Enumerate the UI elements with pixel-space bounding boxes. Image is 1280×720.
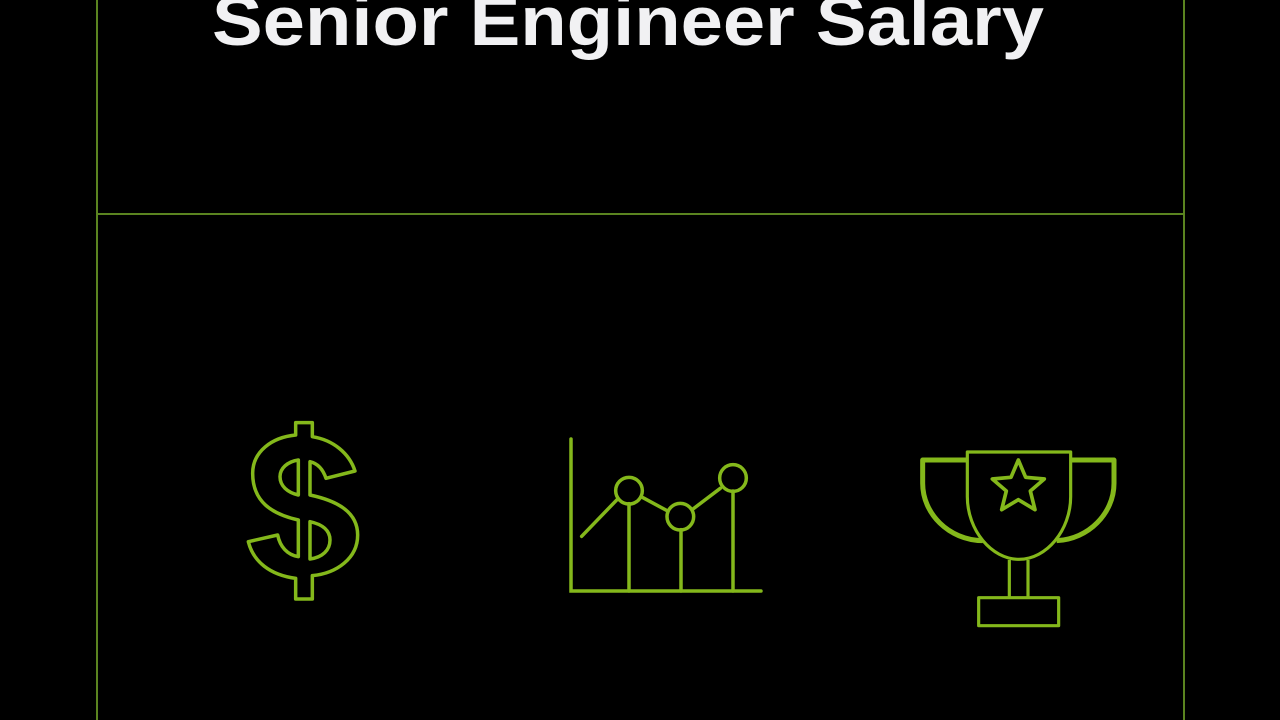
- icon: trophy: [923, 452, 1114, 626]
- icon: dollar sign: [248, 423, 358, 599]
- icon: line chart: [571, 439, 761, 591]
